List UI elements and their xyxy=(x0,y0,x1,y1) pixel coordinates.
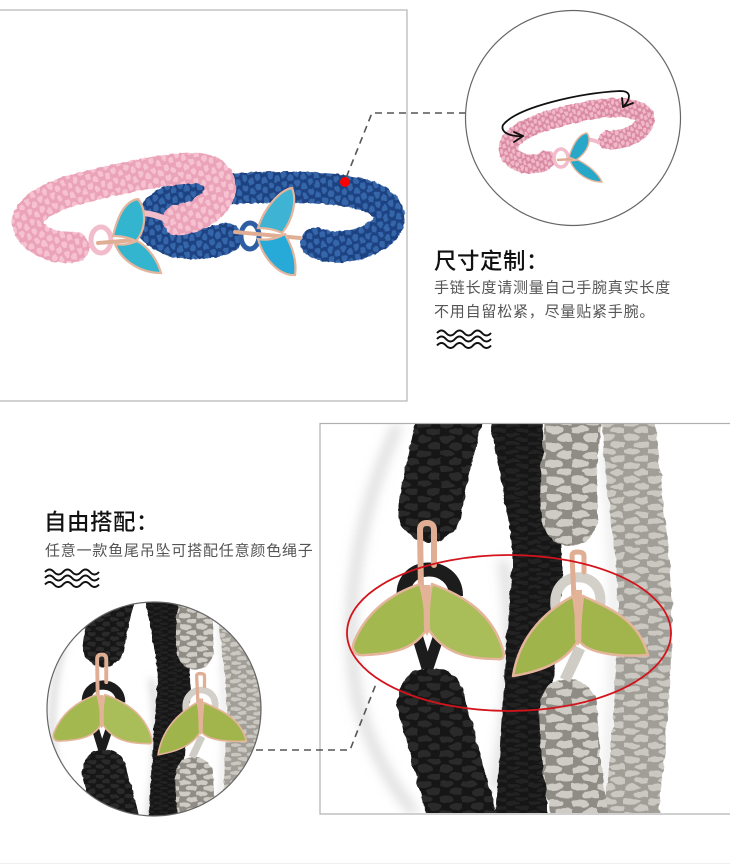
panel: top product photo xyxy=(0,10,407,401)
icon: waves xyxy=(437,330,491,348)
circle: measuring the bracelet xyxy=(466,10,680,226)
circle: close-up thumbnail xyxy=(46,601,262,817)
pink bracelet xyxy=(27,168,220,273)
red marker dot xyxy=(340,177,350,187)
callout leader line: size xyxy=(346,113,466,178)
panel: close-up photo xyxy=(320,410,730,830)
text block: size description: 不用自留松紧，尽量贴紧手腕。 xyxy=(434,304,655,320)
arrow: wrist measurement xyxy=(502,91,633,142)
heading: size: 尺寸定制： xyxy=(434,249,549,274)
red ellipse highlight xyxy=(347,555,671,711)
callout leader line: close-up xyxy=(256,684,376,750)
heading: free matching: 自由搭配： xyxy=(44,510,159,535)
blue bracelet xyxy=(151,187,389,275)
text block: matching description: 任意一款鱼尾吊坠可搭配任意颜色绳子 xyxy=(45,542,314,560)
small pink bracelet xyxy=(508,108,645,182)
icon: waves xyxy=(45,570,99,587)
text block: size description: 手链长度请测量自己手腕真实长度 xyxy=(434,278,671,296)
text block: size description xyxy=(434,278,671,320)
